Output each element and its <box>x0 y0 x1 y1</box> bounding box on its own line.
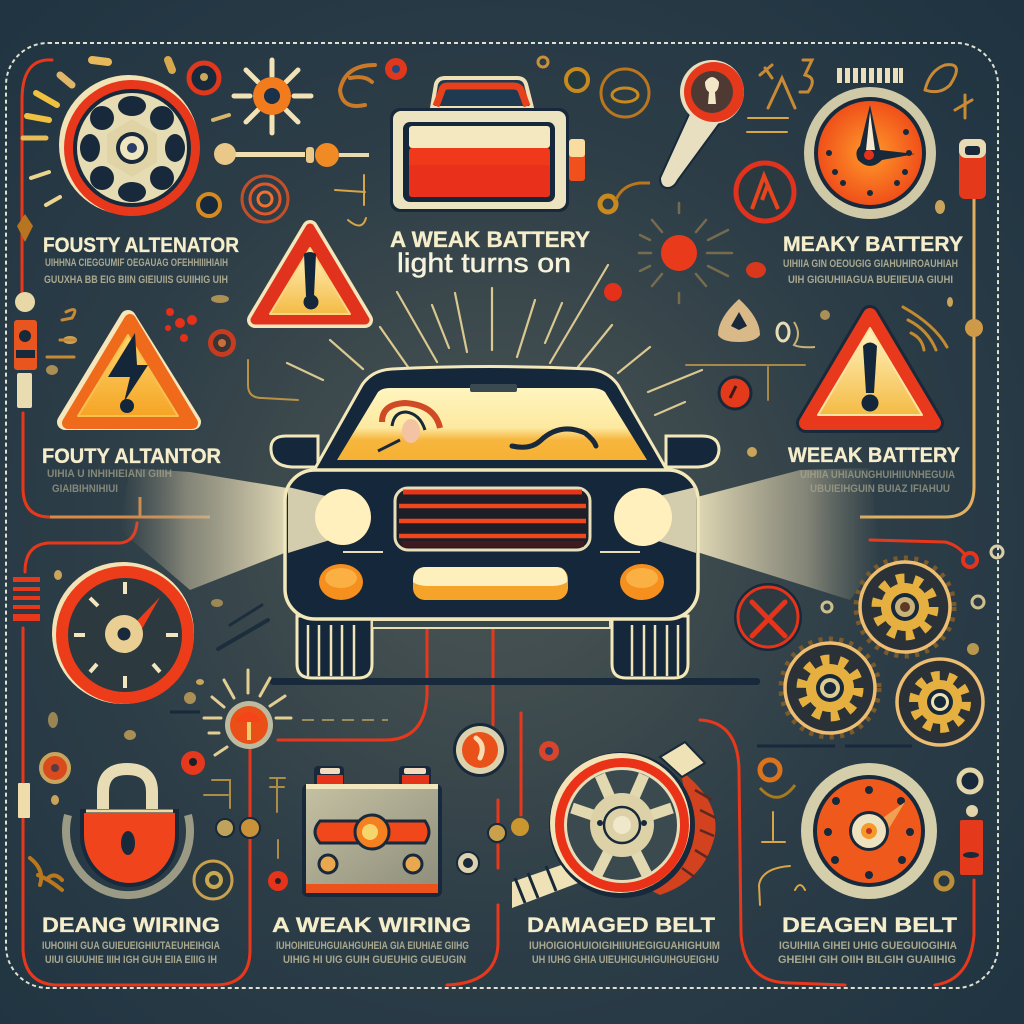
left side connector <box>14 214 37 408</box>
description: UIHIA U INHIHIEIANI GIIIH <box>47 468 172 480</box>
icon: red device <box>960 805 983 875</box>
windshield <box>337 388 647 460</box>
coil <box>13 577 40 621</box>
icon: target <box>242 176 288 222</box>
icon: clock gauge <box>804 87 936 219</box>
headlight left <box>315 489 371 545</box>
small right rings <box>822 546 1003 655</box>
description: GUUXHA BB EIG BIIN GIEIUIIS GUIIHIG UIH <box>44 274 228 286</box>
nodes <box>216 818 260 838</box>
panel: deang wiring <box>30 754 285 966</box>
icon: warning triangle top <box>255 228 365 320</box>
panel: deagen belt <box>759 760 983 966</box>
icon: hook <box>759 866 805 905</box>
road shadow <box>270 678 760 685</box>
icon: small symbols <box>777 322 815 347</box>
headlight beams <box>120 468 880 600</box>
cabin <box>313 366 668 472</box>
title: A WEAK BATTERY <box>390 227 590 252</box>
panel: a weak wiring <box>268 741 559 966</box>
icon: bracket <box>248 360 298 400</box>
warning lamp in windshield <box>378 403 440 451</box>
description: UBUIEIHGUIN BUIAZ IFIAHUU <box>810 483 950 495</box>
fog light right <box>620 564 664 600</box>
lower bumper bar <box>372 620 610 628</box>
nodes <box>457 741 559 874</box>
right beam inside body <box>655 487 696 553</box>
icon: car battery <box>302 766 442 897</box>
icon: glowing switch <box>204 670 291 755</box>
icon: shield <box>718 299 760 342</box>
description: UIHIIA GIN OEOUGIG GIAHUHIROAUHIAH <box>783 258 958 270</box>
icon: orange ring <box>198 194 220 216</box>
icon: small target <box>208 329 236 357</box>
icon: ring right <box>959 770 981 792</box>
title: light turns on <box>397 248 571 278</box>
icon: red blob <box>746 262 766 278</box>
dashes and ornaments <box>170 605 912 746</box>
gear right <box>897 659 983 745</box>
left beam inside body <box>288 487 330 553</box>
description <box>783 258 958 286</box>
gear left <box>783 641 877 735</box>
node <box>965 319 983 337</box>
icon: red flower <box>165 308 197 342</box>
icon: slider <box>214 143 369 167</box>
title <box>390 227 590 278</box>
icon: red dot left <box>181 751 205 775</box>
icon: sun gear <box>234 60 311 133</box>
description: UH IUHG GHIA UIEUHIGUHIGUIHGUEIGHU <box>532 954 719 966</box>
icon: swirl <box>340 65 375 106</box>
mirrors <box>271 436 719 467</box>
description <box>800 469 955 495</box>
small ornaments top <box>335 57 650 301</box>
description: IUHOIGIOHUIOIGIHIIUHEGIGUAHIGHUIM <box>529 940 720 952</box>
icon: orange dial <box>801 763 937 899</box>
light rays <box>287 265 702 415</box>
panel: damaged belt <box>512 742 720 966</box>
description <box>42 940 220 966</box>
icon: red dot ring <box>385 58 407 80</box>
description <box>778 940 957 966</box>
panel: faulty alternator <box>23 60 239 286</box>
heading: fousty altenator: FOUSTY ALTENATOR <box>43 234 239 257</box>
heading: deang wiring: DEANG WIRING <box>42 914 220 937</box>
heading: meaky battery: MEAKY BATTERY <box>783 233 963 256</box>
fog light left <box>319 564 363 600</box>
icon: gear cluster <box>783 560 983 745</box>
icon: belt pulley <box>512 742 716 908</box>
icon: left speed gauge <box>52 562 194 704</box>
icon: alternator sparks <box>23 60 229 205</box>
description: UIH GIGIUHIIAGUA BUEIIEUIA GIUHI <box>788 274 953 286</box>
heading: damaged belt: DAMAGED BELT <box>527 914 715 937</box>
description: IUHOIHIEUHGUIAHGUHEIA GIA EIUHIAE GIIHG <box>276 940 469 952</box>
icon: knob <box>453 723 507 777</box>
icon: key <box>660 60 744 188</box>
description <box>47 468 172 495</box>
icon: red button <box>719 377 751 409</box>
tan glyph marks <box>47 60 972 357</box>
heading: deagen belt: DEAGEN BELT <box>782 914 957 937</box>
icon: glowing red lamp <box>639 203 732 303</box>
description <box>529 940 720 966</box>
rear view mirror <box>470 384 517 392</box>
icon: warning arcs <box>903 307 947 350</box>
heading: a weak wiring: A WEAK WIRING <box>272 914 471 937</box>
centre light bar <box>413 567 568 600</box>
description <box>276 940 469 966</box>
icon: ring left <box>41 754 69 782</box>
icon: small ring <box>936 873 952 889</box>
description: UIHIIA UHIAUNGHUIHIIUNHEGUIA <box>800 469 955 481</box>
icon: alternator wheel <box>59 75 200 216</box>
icon: circled warning A <box>736 163 794 221</box>
icon: T marker <box>762 812 785 842</box>
car <box>270 366 760 685</box>
headlight right <box>614 488 672 546</box>
icon: tool bars <box>747 118 788 132</box>
icon: warning triangle left <box>65 318 193 423</box>
grille <box>395 488 590 550</box>
description: IGUIHIIA GIHEI UHIG GUEGUIOGIHIA <box>779 940 957 952</box>
wiper <box>512 429 596 447</box>
icon: ring top left <box>760 760 795 797</box>
description: GIAIBIHNIHIUI <box>52 483 118 495</box>
icon: warning triangle right <box>806 315 934 423</box>
description: UIHIG HI UIG GUIH GUEUHIG GUEUGIN <box>283 954 466 966</box>
icon: connector <box>959 139 986 199</box>
description: IUHOIIHI GUA GUIEUEIGHIUTAEUHEIHGIA <box>42 940 220 952</box>
icon: bracket marks <box>204 778 285 858</box>
icon: battery <box>390 78 585 212</box>
icon: red ring <box>189 63 219 93</box>
icon: red dot <box>268 871 288 891</box>
icon: ring right <box>194 861 232 899</box>
icon: comb bar <box>837 68 903 83</box>
left lower connector <box>18 783 30 818</box>
heading: weak battery: WEEAK BATTERY <box>788 444 960 467</box>
gear top <box>858 560 952 654</box>
icon: rope knot <box>30 858 62 890</box>
wheels <box>297 616 688 678</box>
icon: bracket lines <box>686 365 805 400</box>
description <box>44 257 228 286</box>
heading: fouty altantor: FOUTY ALTANTOR <box>42 445 221 468</box>
description: UIUI GIUUHIE IIIH IGH GUH EIIA EIIIG IH <box>45 954 217 966</box>
hood highlights <box>343 551 640 553</box>
description: GHEIHI GIH OIIH BILGIH GUAIIHIG <box>778 954 956 966</box>
body <box>285 470 698 619</box>
panel: key and clock <box>639 60 986 303</box>
icon: crossed circle <box>734 583 802 651</box>
description: UIHHNA CIEGGUMIF OEGAUAG OFEHHIIIHIAIH <box>45 257 228 269</box>
small tan ornaments <box>46 200 953 805</box>
icon: padlock <box>66 769 190 895</box>
